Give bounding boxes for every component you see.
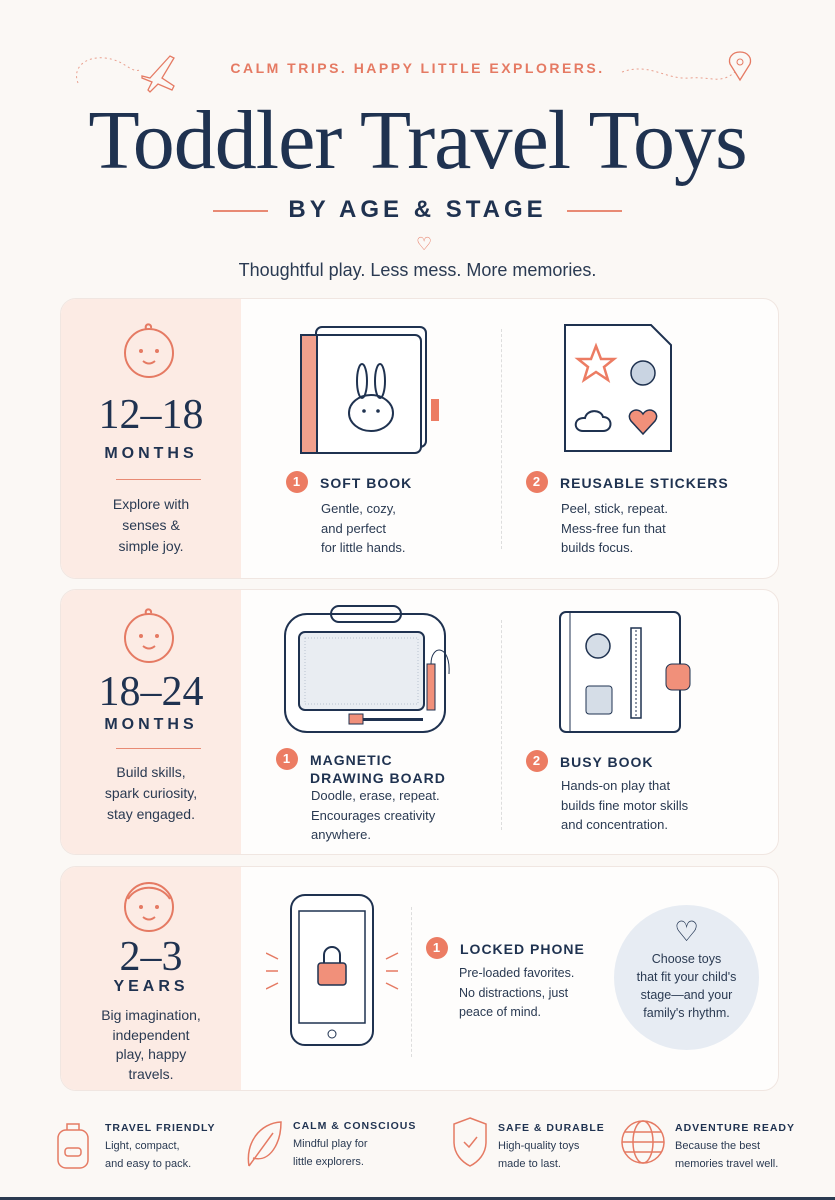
panel: 12-18 months: Gentle, cozy, [321,501,396,516]
toy 1: locked phone: 1 [433,940,441,955]
panel: 12-18 months: MONTHS [104,445,198,462]
age description: Explore with [113,496,189,512]
callout: choose toys: stage—and your [641,988,732,1002]
age label: 2–3 [120,934,182,980]
footer features: CALM & CONSCIOUS [293,1120,416,1132]
icon: child face [124,882,174,932]
callout: choose toys: Choose toys [652,952,721,966]
callout: choose toys: that fit your child's [637,970,736,984]
icon: baby face [124,608,174,663]
age description [101,1007,201,1082]
panel: 2-3 years: No distractions, just [459,986,568,1000]
footer features [57,1117,795,1170]
subtitle: BY AGE & STAGE [288,196,547,223]
callout: choose toys: ♡ [674,916,699,947]
footer features: and easy to pack. [105,1158,191,1170]
callout: choose toys [614,905,759,1050]
age description: senses & [122,517,180,533]
icon: airplane with dotted path [76,55,175,93]
toy 1: magnetic drawing board: 1 [283,751,291,766]
panel: 2-3 years: YEARS [113,978,189,995]
age description: independent [112,1026,190,1042]
panel: 18-24 months: Encourages creativity [311,808,435,822]
footer features: made to last. [498,1158,561,1170]
panel: 18-24 months: and concentration. [561,817,668,832]
footer features: High-quality toys [498,1140,579,1152]
feature: adventure ready [621,1120,795,1170]
toy 1: magnetic drawing board: MAGNETIC [310,752,393,768]
age description: Big imagination, [101,1007,201,1023]
illustration: magnetic drawing board [284,605,450,733]
panel: 2-3 years [60,866,779,1091]
tagline 2: Thoughtful play. Less mess. More memories. [239,260,596,280]
panel: 18-24 months [60,589,779,855]
age description: play, happy [116,1046,186,1062]
footer features: TRAVEL FRIENDLY [105,1122,215,1134]
toy 1: locked phone [426,937,585,959]
illustration: reusable stickers [564,324,672,452]
toy 2: reusable stickers [526,471,729,493]
toy 2: busy book [526,750,654,772]
panel: 18-24 months: Doodle, erase, repeat. [311,788,440,803]
icon: map pin with dotted path [622,51,752,82]
toy 1: soft book: 1 [293,474,301,489]
panel: 12-18 months: builds focus. [561,540,633,555]
toy 1: magnetic drawing board [276,748,446,786]
age label: 12–18 [98,392,204,438]
age description: simple joy. [118,538,184,554]
toy 2: reusable stickers: 2 [533,474,541,489]
footer features: Because the best [675,1140,760,1152]
toy 1: locked phone: LOCKED PHONE [460,941,585,957]
feature: travel friendly [57,1122,215,1170]
feature: safe & durable [453,1117,605,1170]
age label: 18–24 [98,669,204,715]
panel: 18-24 months: anywhere. [311,827,371,842]
icon: heart: ♡ [416,234,432,254]
tagline: CALM TRIPS. HAPPY LITTLE EXPLORERS. [230,60,605,76]
feature: calm & conscious [248,1120,416,1168]
icon: baby face [124,323,174,378]
footer features: memories travel well. [675,1158,778,1170]
age description [113,496,189,554]
panel: 12-18 months: Mess-free fun that [561,520,666,536]
toy 2: busy book: 2 [533,753,541,768]
illustration: soft book [300,326,439,454]
toy 2: reusable stickers: REUSABLE STICKERS [560,475,729,491]
toy 1: soft book: SOFT BOOK [320,475,412,491]
age description: stay engaged. [107,806,195,822]
panel: 2-3 years: Pre-loaded favorites. [459,966,574,980]
age description: spark curiosity, [105,785,197,801]
panel: 18-24 months: builds fine motor skills [561,798,688,812]
panel: 18-24 months: MONTHS [104,716,198,733]
toy 1: magnetic drawing board: DRAWING BOARD [310,770,446,786]
bottom bar [0,1197,835,1200]
footer features: ADVENTURE READY [675,1122,795,1134]
panel: 12-18 months: for little hands. [321,540,406,555]
footer features: SAFE & DURABLE [498,1122,605,1134]
title: Toddler Travel Toys [88,94,747,187]
footer features: Light, compact, [105,1140,180,1152]
footer features: little explorers. [293,1156,364,1168]
panel: 12-18 months: and perfect [321,520,386,536]
panel: 12-18 months: Peel, stick, repeat. [561,501,668,516]
panel: 2-3 years: peace of mind. [459,1005,541,1019]
callout: choose toys: family's rhythm. [643,1006,730,1020]
panel: 18-24 months: Hands-on play that [561,778,670,793]
illustration: locked phone [266,894,398,1046]
toy 1: soft book [286,471,412,493]
panel: 12-18 months [60,298,779,579]
age description: Build skills, [116,764,186,780]
illustration: busy book [559,611,690,733]
toy 2: busy book: BUSY BOOK [560,754,654,770]
age description: travels. [128,1066,174,1082]
footer features: Mindful play for [293,1138,368,1150]
age description [105,764,197,822]
